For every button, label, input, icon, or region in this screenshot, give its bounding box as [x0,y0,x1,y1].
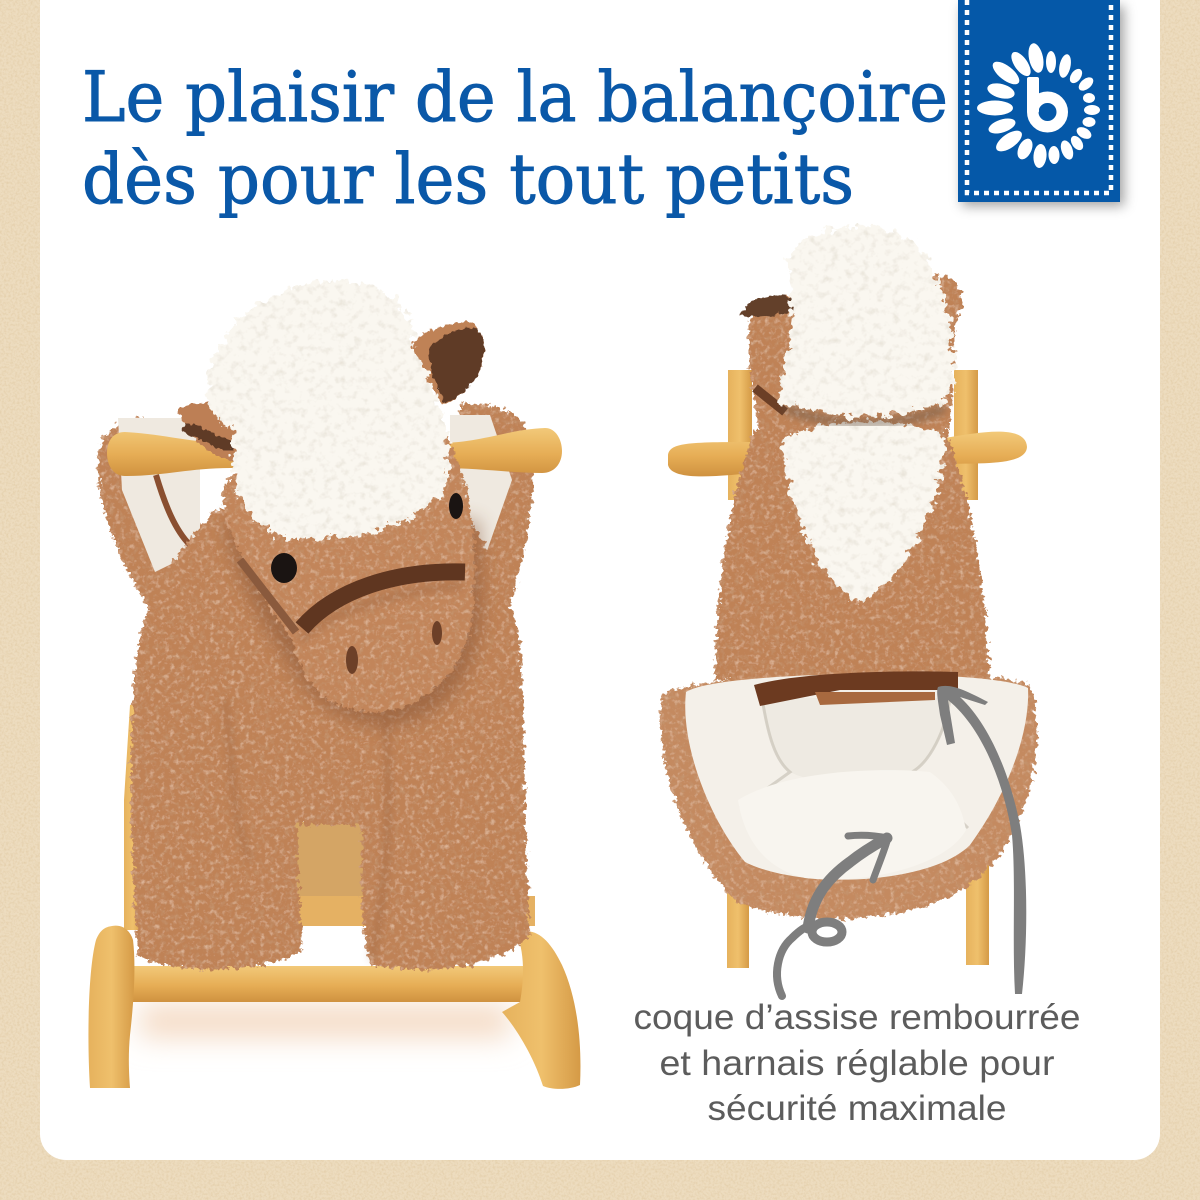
muzzle shading [300,585,462,640]
seat shell behind horse [98,404,534,620]
wooden handle [668,432,1027,476]
wooden handle [107,428,562,476]
wooden back frame [727,370,989,968]
head shadow on body [225,520,482,726]
horse ear: brown [410,322,485,404]
tail [782,422,945,602]
photo: rocking horse back view with seat [660,226,1037,968]
photo: rocking horse front view [88,280,580,1089]
halter [240,560,465,632]
halter at neck [755,388,785,412]
title: Le plaisir de la balançoire [82,58,948,138]
ear [741,295,798,317]
caption: seat and harness [634,998,1080,1128]
brand logo tag [958,0,1124,206]
mane shadow [785,408,945,423]
caption: seat and harness: coque d’assise rembourrée [634,998,1080,1037]
floor shadow [140,1004,510,1038]
seat cushion [685,674,1028,880]
wooden rocker base [88,700,580,1089]
horse head [222,430,474,712]
adjustable harness [754,671,958,706]
seat shell [660,673,1037,919]
nostrils [346,621,442,674]
icon: letter b [1027,77,1062,127]
horse ear: left [178,403,245,462]
icon: flower petals [977,42,1100,169]
title [82,58,948,220]
horse mane [207,280,448,539]
body shading creases [225,700,388,960]
mane [780,226,954,416]
horse head back [748,275,962,430]
horse body back [715,430,990,680]
caption: seat and harness: et harnais réglable pour [660,1044,1055,1083]
horse body and legs [131,510,530,970]
strap [156,475,190,545]
caption: seat and harness: sécurité maximale [708,1089,1006,1128]
arrow: to harness [937,686,1026,994]
eyes [271,493,463,583]
arrow: to seat cushion [777,835,888,996]
title: dès pour les tout petits [82,140,854,220]
